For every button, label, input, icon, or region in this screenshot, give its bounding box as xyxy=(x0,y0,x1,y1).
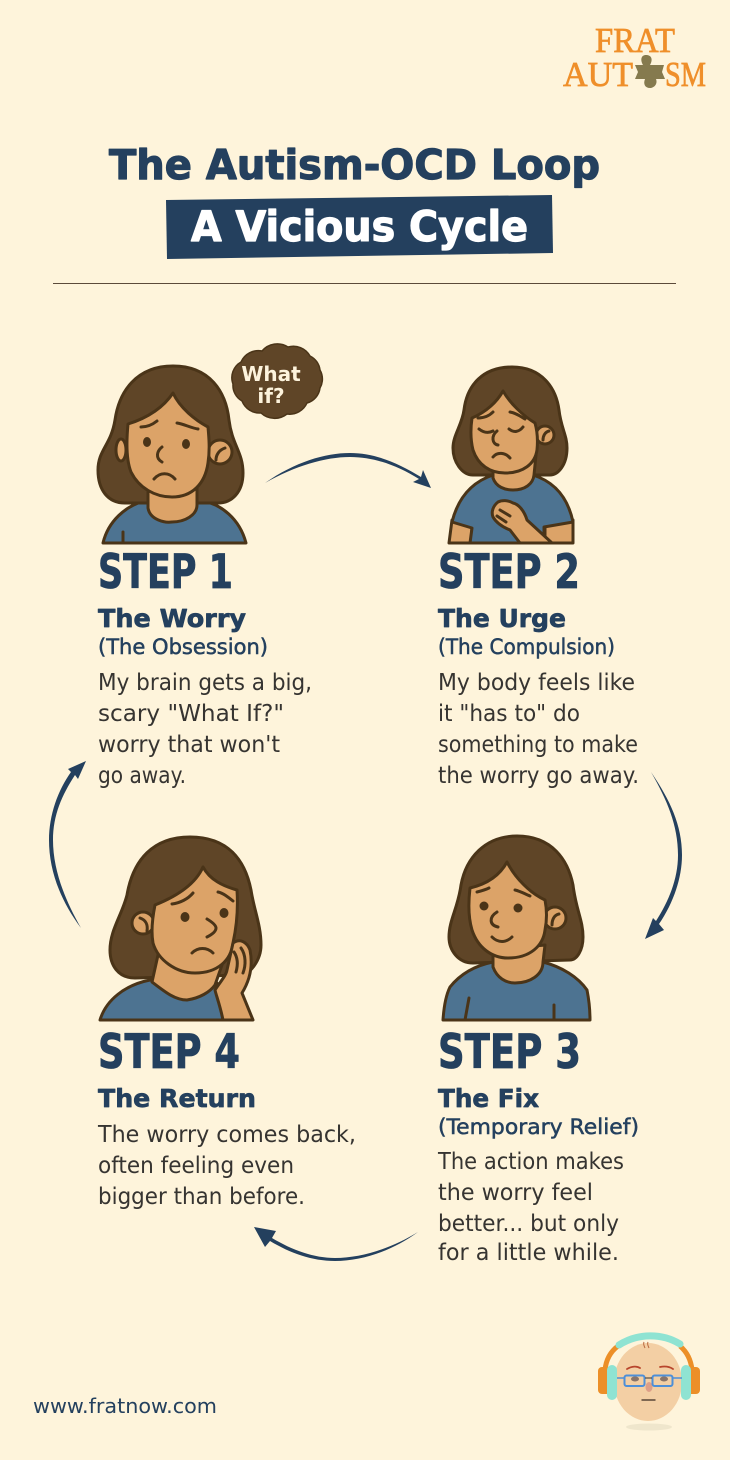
logo: Frat Autism: SM xyxy=(665,55,706,94)
text block: step 1: My brain gets a big, xyxy=(98,670,312,696)
illustration: step 1 worried person with thought bubble xyxy=(98,344,322,543)
text block: step 2: My body feels like xyxy=(438,670,635,696)
illustration: step 2 urge, hand on chest xyxy=(449,367,573,543)
logo: Frat Autism: FRAT xyxy=(595,21,675,60)
arrow: step 2 to step 3 xyxy=(645,772,682,939)
text block: step 1: STEP 1 xyxy=(98,545,233,600)
text block: step 3: The action makes xyxy=(437,1149,624,1175)
illustration: step 4 return, hand on cheek xyxy=(100,837,261,1020)
text block: step 2: The Urge xyxy=(438,604,566,633)
subtitle banner: A Vicious Cycle xyxy=(191,202,528,251)
text block: step 3: the worry feel xyxy=(438,1180,593,1206)
website: www.fratnow.com xyxy=(33,1394,217,1418)
text block: step 4: often feeling even xyxy=(98,1153,294,1179)
text block: step 3: for a little while. xyxy=(438,1240,619,1266)
text block: step 3 xyxy=(437,1025,639,1266)
logo: Frat Autism: AUT xyxy=(563,55,633,94)
text block: step 2: it "has to" do xyxy=(438,701,580,727)
text block: step 1: (The Obsession) xyxy=(98,635,268,659)
thought bubble xyxy=(232,344,322,418)
title: The Autism-OCD Loop xyxy=(109,141,600,189)
text block: step 1: worry that won't xyxy=(98,732,280,758)
text block: step 2 xyxy=(438,545,639,789)
text block: step 3: The Fix xyxy=(438,1084,539,1113)
thought bubble: What xyxy=(241,362,301,386)
text block: step 4: The worry comes back, xyxy=(97,1122,356,1148)
text block: step 1: go away. xyxy=(98,763,186,789)
arrow: step 1 to step 2 xyxy=(265,453,431,488)
text block: step 4 xyxy=(97,1025,356,1210)
logo: Frat Autism xyxy=(563,21,706,94)
arrow: step 4 to step 1 xyxy=(49,761,86,928)
text block: step 4: The Return xyxy=(98,1084,256,1113)
text block: step 3: better... but only xyxy=(438,1211,619,1237)
illustration: step 3 relief, small smile xyxy=(443,836,590,1020)
text block: step 1: scary "What If?" xyxy=(98,701,284,727)
thought bubble: if? xyxy=(257,384,285,408)
text block: step 3: (Temporary Relief) xyxy=(438,1115,639,1139)
arrow: step 3 to step 4 xyxy=(254,1227,418,1261)
text block: step 2: the worry go away. xyxy=(438,763,639,789)
text block: step 1: The Worry xyxy=(98,604,246,633)
text block: step 2: (The Compulsion) xyxy=(438,635,615,659)
text block: step 4: STEP 4 xyxy=(98,1025,240,1080)
text block: step 4: bigger than before. xyxy=(98,1184,305,1210)
text block: step 2: STEP 2 xyxy=(438,545,580,600)
text block: step 3: STEP 3 xyxy=(438,1025,581,1080)
icon: avatar with headphones xyxy=(598,1336,700,1430)
text block: step 1 xyxy=(98,545,312,789)
text block: step 2: something to make xyxy=(438,732,638,758)
